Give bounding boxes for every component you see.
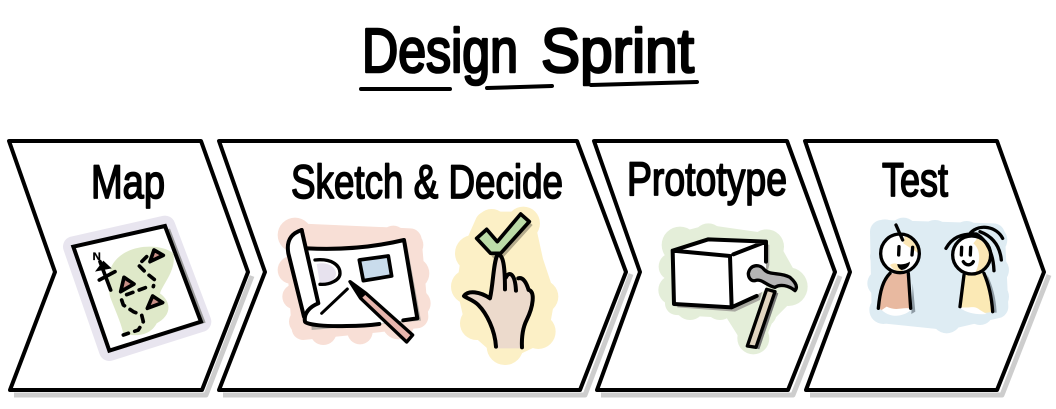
heading: Test: Test [882, 153, 948, 206]
right person [946, 227, 1003, 314]
icon: two people talking [867, 218, 1009, 333]
panel: Map [9, 141, 252, 395]
heading: Prototype: Prototype [627, 152, 787, 205]
icon: check mark and pointing hand [451, 207, 558, 365]
heading: Sketch & Decide: Sketch & Decide [291, 155, 563, 208]
icon: treasure map: N [93, 251, 101, 263]
heading: Map: Map [91, 155, 165, 208]
icon: sketch paper and pencil [278, 218, 431, 345]
left person [878, 225, 919, 316]
panel: Test [805, 141, 1049, 395]
icon: treasure map [73, 226, 206, 351]
panel: Sketch & Decide [219, 141, 631, 395]
title: Design Sprint: Sprint [541, 17, 694, 86]
title: Design Sprint [361, 17, 697, 89]
panel: Prototype [594, 141, 840, 395]
icon: cube and hammer [658, 223, 808, 354]
title: Design Sprint: Design [362, 17, 518, 86]
